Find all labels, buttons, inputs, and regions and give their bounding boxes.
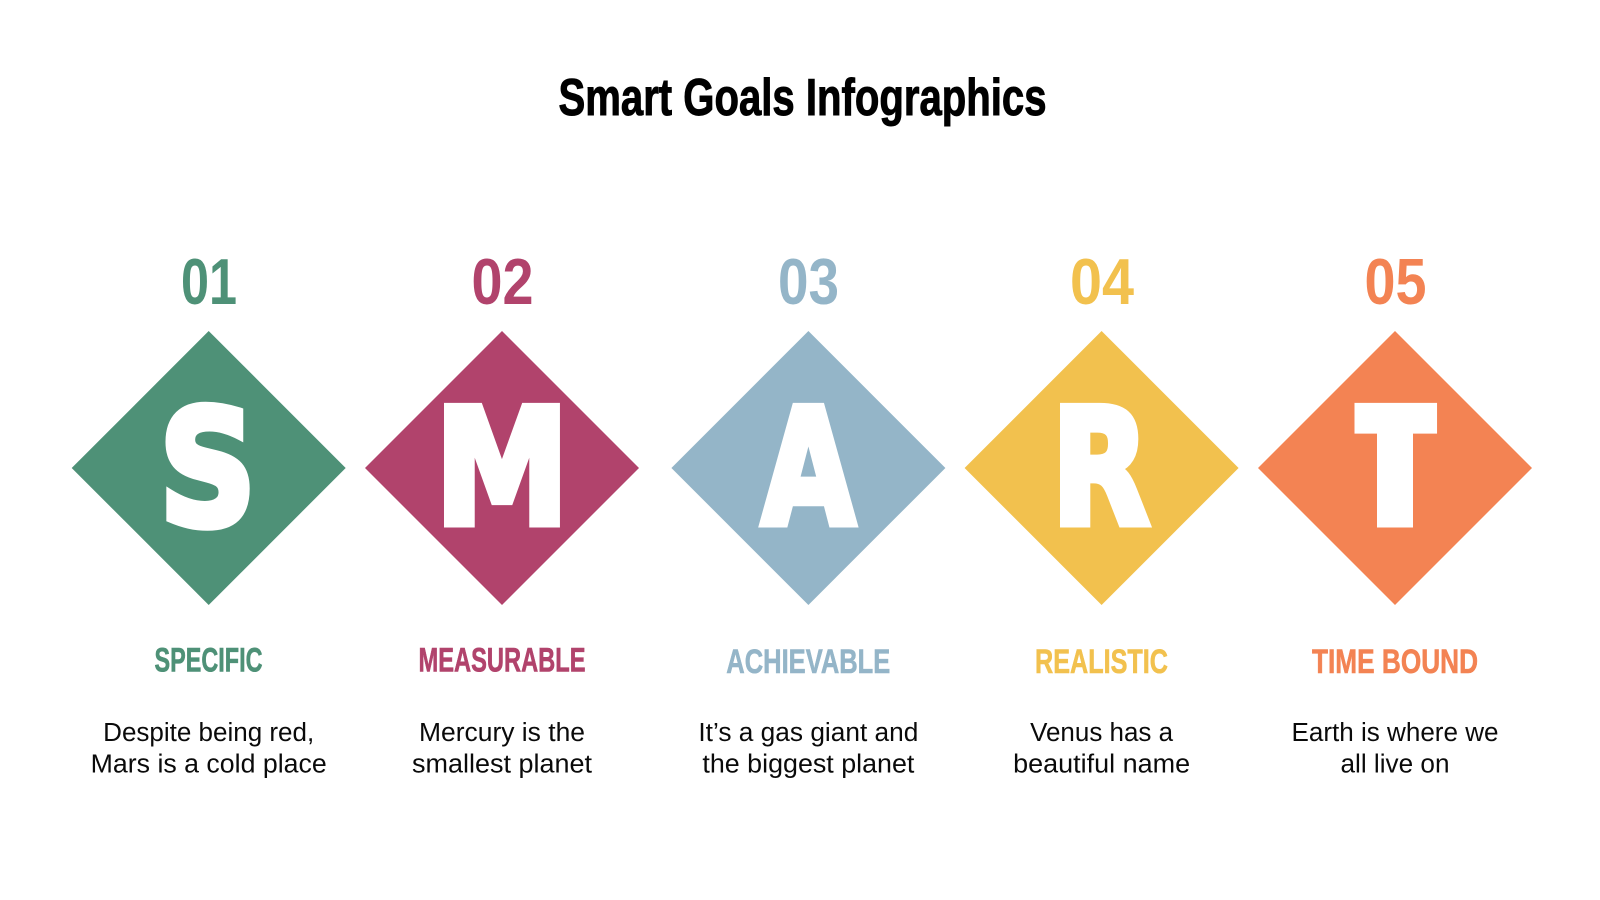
number 05: 05: [1364, 245, 1426, 318]
diamond S: S: [159, 376, 256, 562]
diamond T: T: [1357, 374, 1435, 562]
number 01: 01: [181, 245, 237, 318]
panel: time bound: [1258, 245, 1532, 778]
description: measurable: smallest planet: [412, 750, 592, 778]
description: achievable: It’s a gas giant and: [698, 719, 918, 747]
description: measurable: Mercury is the: [419, 719, 585, 747]
number 03: 03: [778, 245, 839, 318]
title: Smart Goals Infographics: [558, 69, 1046, 127]
description: time bound: Earth is where we: [1292, 719, 1498, 747]
description: achievable: the biggest planet: [702, 750, 914, 778]
description: specific: Mars is a cold place: [91, 750, 327, 778]
description: time bound: all live on: [1340, 750, 1450, 778]
diamond R: R: [1052, 374, 1150, 562]
panel: measurable: [365, 245, 639, 778]
number 04: 04: [1070, 245, 1134, 318]
description: realistic: beautiful name: [1013, 750, 1190, 778]
diamond A: [671, 331, 945, 605]
label: achievable: ACHIEVABLE: [726, 643, 890, 681]
description: specific: Despite being red,: [103, 719, 314, 747]
diamond A: A: [762, 374, 855, 562]
diamond T: [1258, 331, 1532, 605]
diamond M: M: [435, 374, 569, 562]
label: specific: SPECIFIC: [154, 642, 262, 680]
label: time bound: TIME BOUND: [1312, 643, 1478, 681]
number 02: 02: [472, 245, 534, 318]
label: realistic: REALISTIC: [1035, 643, 1168, 681]
diamond S: [72, 331, 346, 605]
diamond R: [965, 331, 1239, 605]
description: realistic: Venus has a: [1030, 719, 1174, 747]
panel: realistic: [965, 245, 1239, 778]
diamond M: [365, 331, 639, 605]
panel: achievable: [671, 245, 945, 778]
panel: specific: [72, 245, 346, 778]
label: measurable: MEASURABLE: [418, 642, 586, 680]
